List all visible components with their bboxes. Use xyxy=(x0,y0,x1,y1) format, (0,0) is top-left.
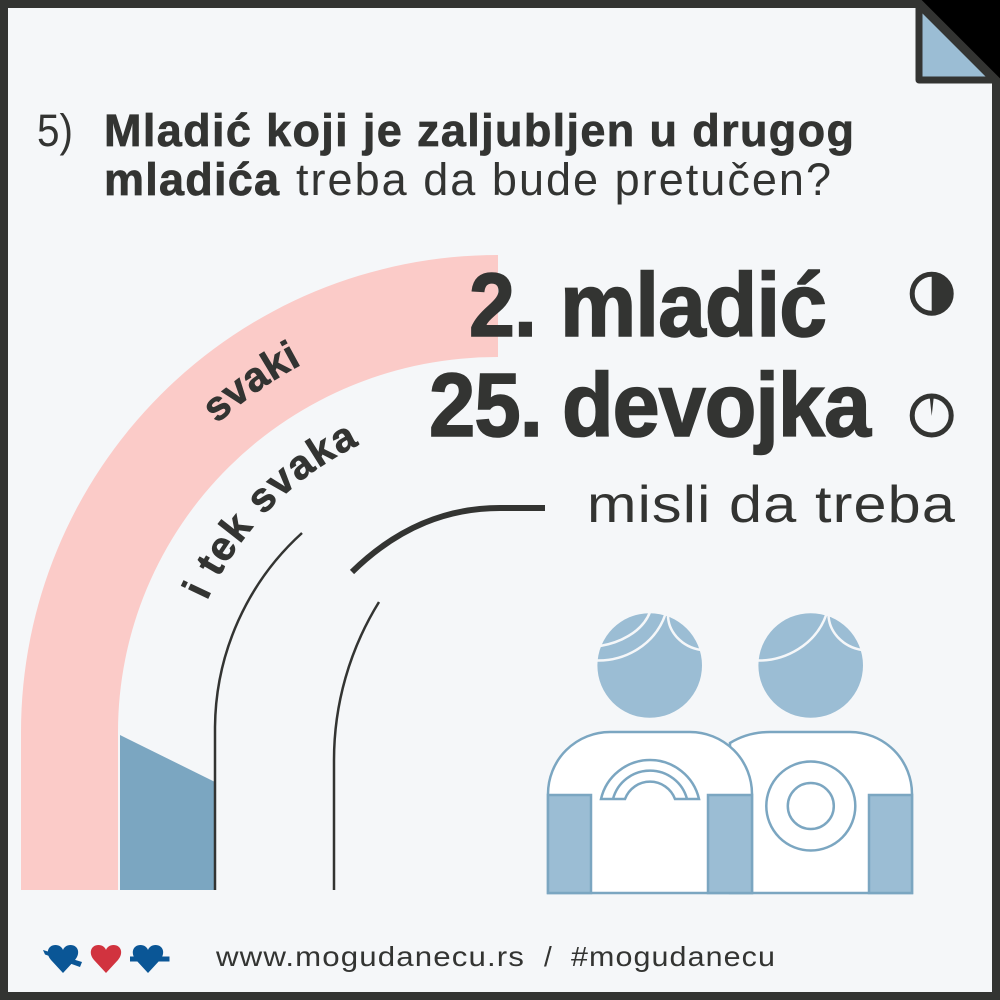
chart: blue segment for girls xyxy=(120,735,215,890)
icon: red heart xyxy=(91,945,121,973)
statistic: 2. mladić: mladić xyxy=(560,256,826,356)
statistic: 25. devojka: 25. xyxy=(429,356,542,456)
question heading: mladića xyxy=(104,154,280,205)
icon: heart with arrow, horizontal xyxy=(130,945,170,973)
question heading: treba da bude pretučen? xyxy=(296,154,831,205)
figure: right boy head xyxy=(758,613,863,718)
footer text xyxy=(215,941,776,972)
chart: pink arc for boys xyxy=(21,255,498,890)
footer text: www.mogudanecu.rs xyxy=(215,941,525,972)
arc label: i tek svaka: i tek svaka xyxy=(180,428,360,599)
statistic: 25. devojka: devojka xyxy=(562,356,872,456)
text: misli da treba: misli da treba xyxy=(587,476,956,534)
question heading xyxy=(104,105,854,205)
statistic: 2. mladić: 2. xyxy=(469,256,536,356)
icon: heart with arrow, tilted xyxy=(43,945,82,973)
figure: left boy body xyxy=(548,732,752,893)
question number: 5) xyxy=(37,105,73,156)
guide line: inner xyxy=(334,602,379,890)
statistic: 25. devojka xyxy=(429,356,872,456)
icon: half circle xyxy=(912,272,953,315)
leader line to misli da treba xyxy=(352,508,545,572)
illustration: two boys xyxy=(548,612,912,893)
question heading: Mladić koji je zaljubljen u drugog xyxy=(104,105,854,156)
arc label: svaki: svaki xyxy=(206,339,300,421)
footer text: / xyxy=(544,941,552,972)
figure: right boy body xyxy=(730,732,912,893)
footer text: #mogudanecu xyxy=(571,941,776,972)
guide line: outer xyxy=(215,533,302,890)
figure: left boy head xyxy=(597,612,702,718)
icon: small slice circle xyxy=(912,395,951,435)
icon: folded corner xyxy=(919,6,994,80)
